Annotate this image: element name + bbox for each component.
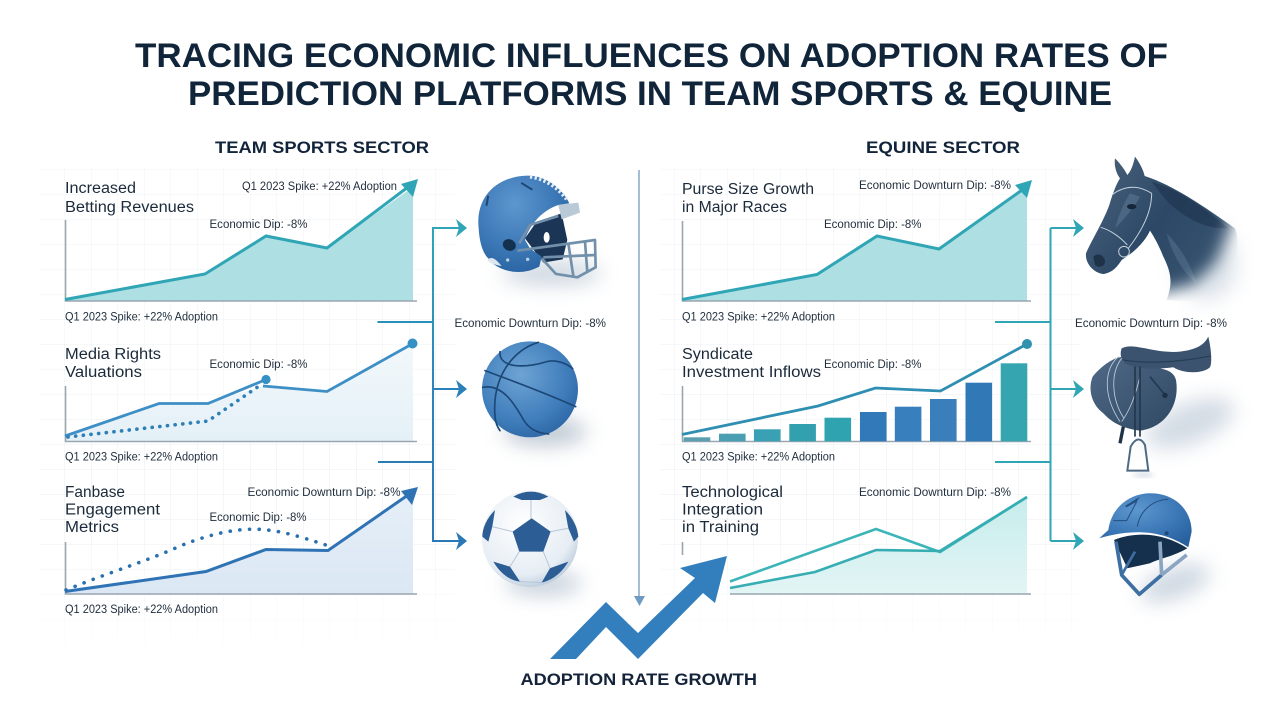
chart title: in Major Races	[682, 199, 787, 216]
title: PREDICTION PLATFORMS IN TEAM SPORTS & EQUINE	[188, 75, 1112, 113]
annotation: dip: Economic Dip: -8%	[210, 219, 308, 231]
chart title: Valuations	[65, 364, 142, 381]
area chart	[682, 180, 1032, 301]
chart title: in Training	[682, 519, 759, 536]
arrows: team sports connector	[378, 219, 467, 550]
annotation: downturn: Economic Downturn Dip: -8%	[859, 180, 1011, 192]
chart title: Purse Size Growth	[682, 181, 814, 198]
annotation: downturn: Economic Downturn Dip: -8%	[248, 487, 400, 499]
chart title: Betting Revenues	[65, 199, 194, 216]
annotation: lower spike label: Q1 2023 Spike: +22% Adoption	[65, 312, 218, 324]
annotation: spike: Q1 2023 Spike: +22% Adoption	[242, 181, 397, 193]
panel: media rights valuations chart	[65, 338, 418, 464]
title: TRACING ECONOMIC INFLUENCES ON ADOPTION RATES OF	[135, 37, 1168, 75]
arrow: central divider	[634, 170, 645, 606]
area chart	[682, 497, 1031, 594]
chart title: Engagement	[65, 502, 161, 518]
label: adoption rate growth: ADOPTION RATE GROWTH	[520, 671, 757, 689]
annotation: downturn: Economic Downturn Dip: -8%	[859, 487, 1011, 499]
chart title: Integration	[682, 502, 763, 518]
annotation: economic downturn equine: Economic Downturn Dip: -8%	[1075, 318, 1227, 330]
area chart	[65, 487, 418, 594]
chart title: Increased	[65, 180, 136, 197]
arrows: equine connector	[995, 219, 1084, 550]
annotation: dip: Economic Dip: -8%	[824, 359, 922, 371]
chart title: Metrics	[65, 519, 119, 536]
panel: increased betting revenues chart	[65, 179, 418, 324]
annotation: economic downturn team sports: Economic Downturn Dip: -8%	[454, 318, 606, 330]
annotation: dip: Economic Dip: -8%	[824, 219, 922, 231]
icon: football helmet	[478, 176, 602, 285]
annotation: dip: Economic Dip: -8%	[210, 359, 308, 371]
icon: basketball	[482, 341, 587, 446]
panel: technological integration chart	[682, 484, 1031, 594]
annotation: spike: Q1 2023 Spike: +22% Adoption	[682, 312, 835, 324]
arrow: adoption rate growth	[550, 556, 727, 659]
annotation: spike: Q1 2023 Spike: +22% Adoption	[65, 604, 218, 616]
icon: saddle	[1091, 337, 1241, 477]
panel: syndicate investment inflows chart	[682, 339, 1032, 464]
panel: fanbase engagement metrics chart	[65, 484, 418, 616]
title	[135, 37, 1168, 113]
chart title: Media Rights	[65, 346, 161, 363]
panel: purse size growth chart	[682, 180, 1032, 324]
area chart	[65, 179, 418, 301]
chart title: Investment Inflows	[682, 364, 821, 381]
bar and line chart	[682, 339, 1032, 442]
annotation: spike: Q1 2023 Spike: +22% Adoption	[682, 452, 835, 464]
icon: riding helmet	[1099, 493, 1215, 610]
annotation: dip: Economic Dip: -8%	[210, 512, 306, 524]
annotation: spike: Q1 2023 Spike: +22% Adoption	[65, 452, 218, 464]
chart title: Technological	[682, 484, 783, 501]
chart title: Fanbase	[65, 484, 125, 501]
icon: horse head	[1086, 157, 1238, 302]
icon: soccer ball	[482, 491, 582, 595]
line chart	[65, 338, 418, 442]
chart title: Syndicate	[682, 346, 753, 363]
heading: equine sector: EQUINE SECTOR	[866, 138, 1020, 157]
heading: team sports sector: TEAM SPORTS SECTOR	[215, 138, 429, 157]
